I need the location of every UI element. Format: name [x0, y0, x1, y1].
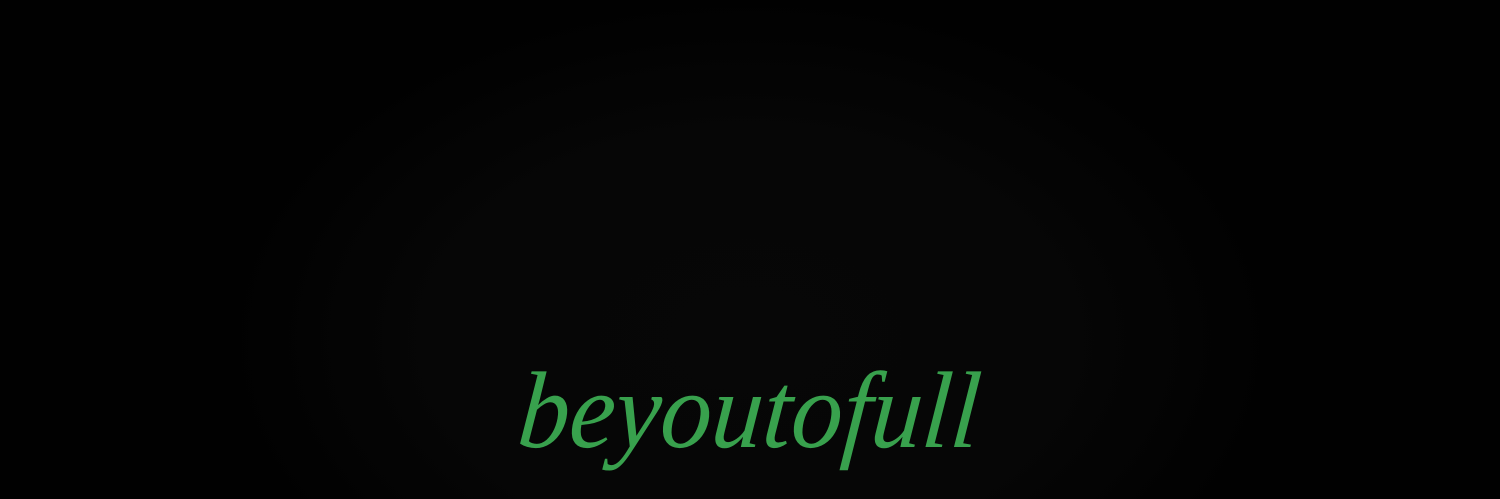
title: beyoutofull wordmark: beyoutofull: [514, 350, 985, 471]
